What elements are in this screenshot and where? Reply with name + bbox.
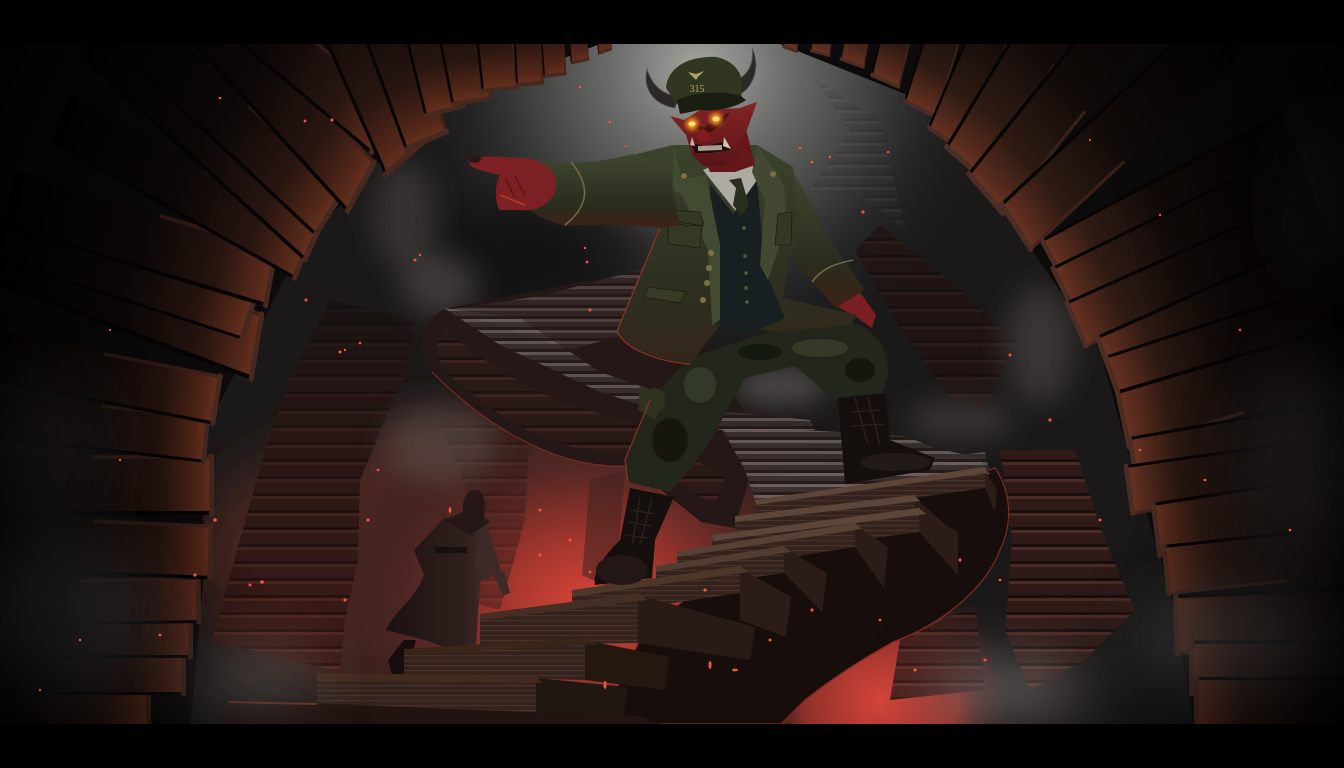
spiral staircase of books <box>422 266 985 528</box>
demon: officer cap <box>666 57 746 114</box>
demon: jacket red rim light <box>617 228 690 364</box>
foreground smoke <box>0 110 1344 714</box>
demon: sleeve cuff braid <box>565 162 585 225</box>
stair underside: looping book mass <box>422 268 760 528</box>
demon: right cuff braid <box>812 260 853 282</box>
column: lower centre stack <box>890 605 985 700</box>
stairs: tread 3 <box>480 593 755 660</box>
demon: snarling mouth <box>690 137 731 153</box>
stairs: dark underside with red rim <box>600 468 1009 724</box>
demon: right lapel <box>752 145 786 280</box>
letterbox bar: top <box>0 0 1344 44</box>
demon: waistcoat <box>710 180 785 335</box>
figure: right sleeve and hand <box>474 520 510 596</box>
distant book columns <box>212 80 1135 700</box>
demon: tie <box>729 178 749 216</box>
stairs: tread 6 <box>677 523 888 588</box>
figure: belt <box>435 547 467 553</box>
stairs: red edge light on bottom tread <box>228 702 317 704</box>
letterbox bar: bottom <box>0 724 1344 768</box>
background: red hellfire glow <box>0 270 1000 730</box>
mid smoke <box>373 160 1075 483</box>
demon: glowing eyes <box>686 113 722 130</box>
demon officer <box>468 48 935 585</box>
stairs: tread 8 <box>735 495 955 555</box>
demon: shirt <box>703 150 758 214</box>
demon: left lapel <box>673 145 720 325</box>
stairs: tread 1 <box>316 673 628 717</box>
stairs: bottom tread <box>226 702 660 724</box>
stairs: tread 4 <box>572 566 791 637</box>
stairs: upper treads near boot <box>755 452 990 500</box>
stairs: tread 9 <box>755 467 997 520</box>
stair treads: upper sweep <box>446 266 660 350</box>
demon: cap number: 315 <box>690 84 704 95</box>
demon: pointing arm sleeve <box>528 154 680 228</box>
stair underside: book-edge ribs <box>437 330 725 506</box>
hooded figure seen from behind <box>386 490 510 675</box>
demon: breast pockets and buttons <box>645 171 792 303</box>
stairs: tread 7 <box>712 508 958 575</box>
demon: right horn <box>726 48 756 97</box>
demon: pointing hand <box>468 156 556 210</box>
background: lower smoky red haze <box>190 410 850 710</box>
book arch: left <box>0 0 612 729</box>
book arch: right <box>782 0 1344 728</box>
column: centre distant stack <box>440 420 530 610</box>
demon: right boot <box>838 393 935 484</box>
demon: left boot <box>595 488 674 585</box>
glowing embers <box>39 86 1291 691</box>
demon: camouflage trousers <box>625 322 888 492</box>
column: right lower stack <box>1000 450 1135 690</box>
demon: right hand on knee <box>834 292 876 328</box>
background: lower right red glow <box>720 560 1050 730</box>
demon: left horn <box>646 69 679 108</box>
stairs: tread 5 <box>656 546 827 612</box>
figure: hood and head <box>444 490 490 535</box>
column: left distant stack <box>212 300 415 672</box>
stair rim: red underglow <box>432 372 700 522</box>
demon: neck <box>705 125 755 172</box>
stair treads: lower sweep <box>444 308 815 430</box>
demon: head <box>670 102 757 167</box>
column: behind-leg stack <box>582 470 625 590</box>
demon: right arm <box>770 168 865 308</box>
background: pale light from above <box>0 0 1344 500</box>
background: dark swirl behind the figure <box>390 170 690 340</box>
figure: legs and boots <box>388 640 480 675</box>
column: spiral back stack <box>810 80 905 230</box>
column: right upper stack <box>855 225 1015 410</box>
stairs: tread 2 <box>404 638 669 690</box>
stair treads: far right landing <box>720 425 985 500</box>
figure: robe <box>386 517 500 647</box>
demon: cap badge <box>688 71 704 80</box>
demon: jacket body <box>617 145 857 364</box>
foreground staircase of giant books <box>226 452 1009 724</box>
